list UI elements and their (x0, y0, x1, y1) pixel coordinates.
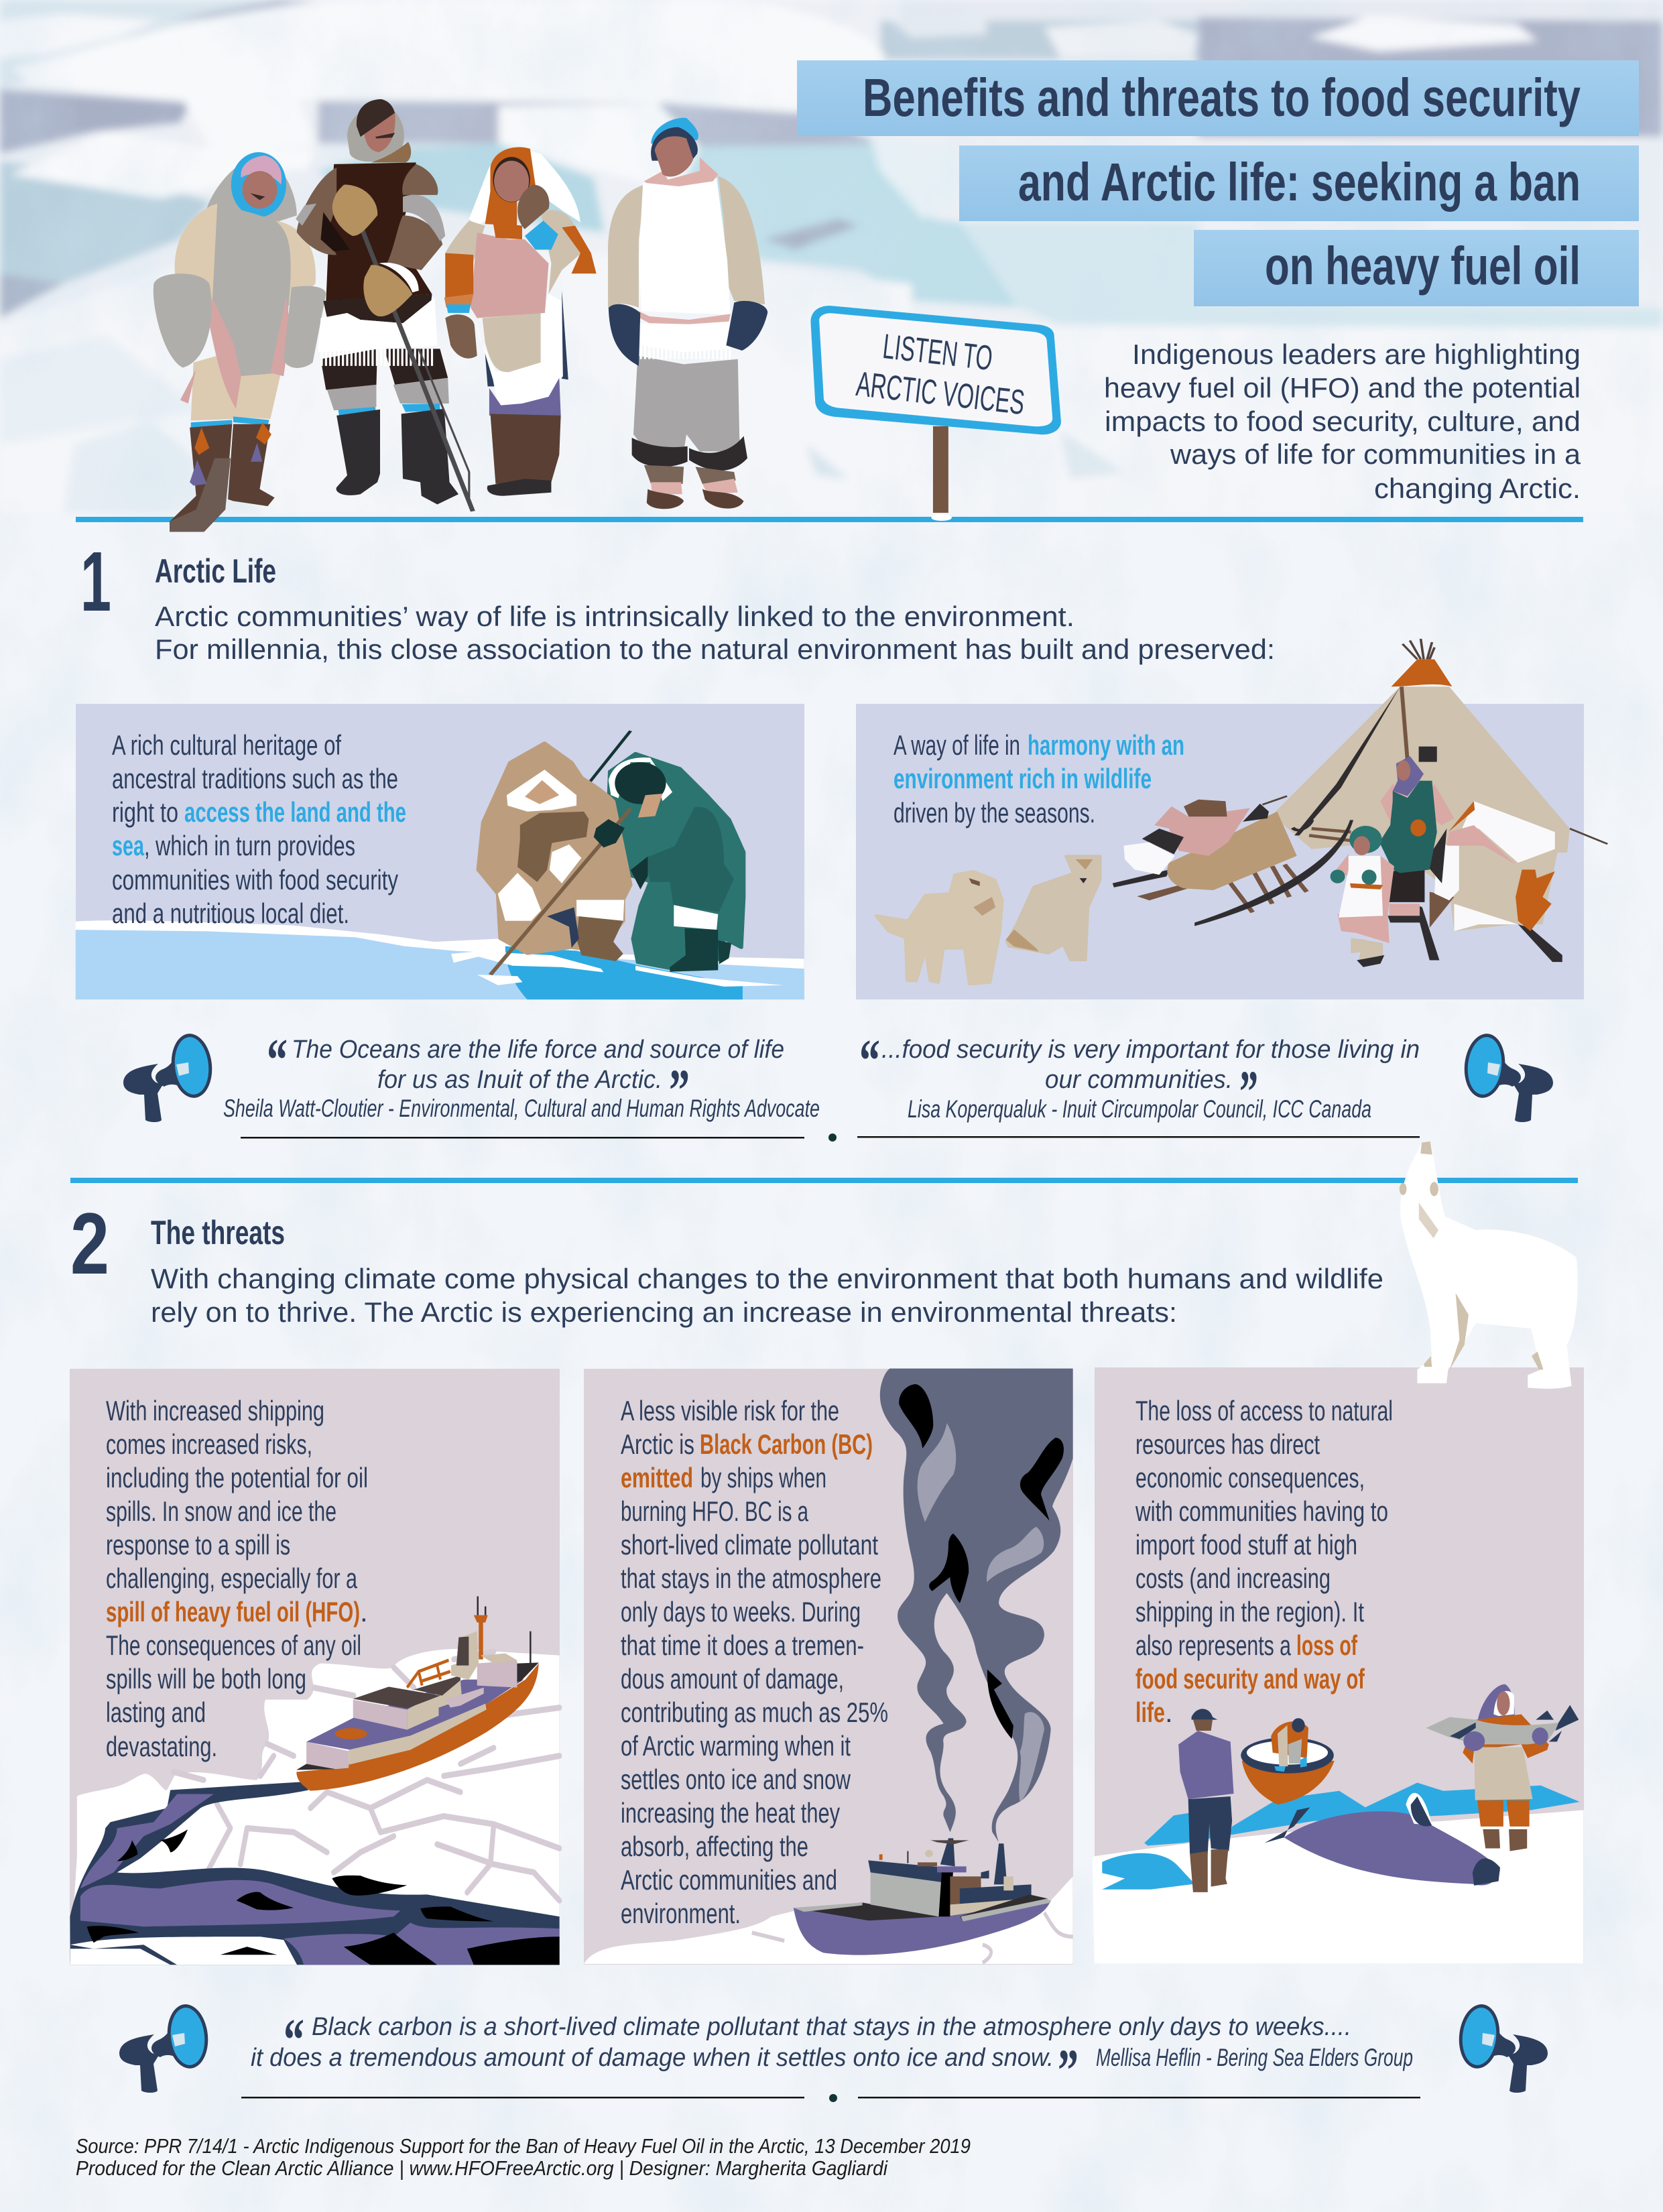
text: loss of access: also represents a (1135, 1630, 1291, 1661)
quote: Sheila Watt-Cloutier: ” (669, 1058, 690, 1124)
title (797, 60, 1639, 306)
text: black carbon: Black Carbon (BC) (700, 1428, 873, 1460)
text: oil spills: . (360, 1596, 368, 1627)
quote: Sheila Watt-Cloutier: “ (267, 1027, 288, 1093)
text: oil spills: comes increased risks, (106, 1428, 312, 1460)
divider line top (76, 517, 1583, 522)
text: cultural heritage (112, 729, 406, 929)
text: loss of access: The loss of access to natural (1135, 1395, 1393, 1426)
text: black carbon: absorb, affecting the (621, 1831, 808, 1862)
person: man in white parka (608, 118, 767, 509)
text: black carbon: that time it does a tremen- (621, 1630, 864, 1661)
quote: Mellisa Heflin: Mellisa Heflin - Bering Sea Elders Group (1096, 2044, 1413, 2071)
section 1 number: 1 (80, 534, 111, 629)
panel: oil spills (70, 1369, 560, 1965)
text: oil spills: With increased shipping (106, 1395, 324, 1426)
text: harmony with wildlife: driven by the seasons. (894, 797, 1095, 828)
quote: Lisa Koperqualuk (859, 1028, 1420, 1125)
text: black carbon: only days to weeks. During (621, 1596, 861, 1627)
icon: megaphone bottom left (119, 2002, 211, 2093)
icon: megaphone right (1461, 1032, 1553, 1122)
text: loss of access: loss of (1296, 1630, 1358, 1661)
quote: Sheila Watt-Cloutier: Sheila Watt-Cloutier - Environmental, Cultural and Human Rights Advocate (223, 1095, 820, 1122)
text: cultural heritage: A rich cultural heritage of (112, 729, 341, 761)
section 2 intro text: rely on to thrive. The Arctic is experiencing an increase in environmental threats: (151, 1296, 1177, 1328)
quote: Lisa Koperqualuk: “ (859, 1028, 880, 1094)
text: oil spills: spills will be both long (106, 1663, 306, 1695)
text: black carbon: that stays in the atmosphere (621, 1562, 881, 1594)
text: loss of access: costs (and increasing (1135, 1562, 1331, 1594)
text: black carbon: Arctic is (621, 1428, 694, 1460)
illustration: polar bear (1400, 1142, 1578, 1389)
divider line middle (70, 1178, 1578, 1183)
quote: Mellisa Heflin: it does a tremendous amount of damage when it settles onto ice and snow. (251, 2044, 1054, 2072)
text: oil spills (106, 1395, 368, 1762)
text: loss of access: economic consequences, (1135, 1462, 1365, 1493)
text: cultural heritage: , which in turn provides (144, 830, 355, 861)
intro text: Indigenous leaders are highlighting (1132, 339, 1581, 370)
text: black carbon: by ships when (700, 1462, 826, 1493)
footer: source and credits (76, 2134, 971, 2180)
text: cultural heritage: access the land and the (184, 796, 406, 828)
text: oil spills: challenging, especially for a (106, 1562, 357, 1594)
text: oil spills: including the potential for oil (106, 1462, 368, 1493)
intro text: changing Arctic. (1374, 473, 1581, 504)
text: cultural heritage: right to (112, 796, 178, 828)
panel: harmony with wildlife (856, 639, 1607, 999)
text: black carbon: A less visible risk for the (621, 1395, 839, 1426)
section 1 intro text: For millennia, this close association to the natural environment has built and preserved: (155, 633, 1275, 665)
quote: Mellisa Heflin: Black carbon is a short-lived climate pollutant that stays in the atmosphere only days to weeks.... (312, 2013, 1351, 2041)
text: black carbon (621, 1395, 888, 1929)
person: woman in grey parka (153, 152, 326, 532)
icon: megaphone bottom right (1456, 2002, 1548, 2093)
text: black carbon: settles onto ice and snow (621, 1764, 851, 1795)
quote: Mellisa Heflin (251, 2007, 1413, 2104)
text: oil spills: spill of heavy fuel oil (HFO) (106, 1596, 360, 1627)
panel: cultural heritage (76, 704, 804, 999)
text: loss of access: life (1135, 1697, 1165, 1728)
illustration: icebreaker and oil spill (70, 1596, 560, 1965)
text: loss of access: resources has direct (1135, 1428, 1320, 1460)
text: harmony with wildlife: environment rich in wildlife (894, 763, 1152, 794)
sign: listen to arctic voices: ARCTIC VOICES (854, 365, 1026, 422)
intro text: heavy fuel oil (HFO) and the potential (1104, 372, 1581, 404)
text: cultural heritage: and a nutritious local diet. (112, 898, 349, 929)
illustration: hunters and whale on ice (1093, 1684, 1584, 1963)
sign: listen to arctic voices (810, 306, 1061, 521)
quote: Lisa Koperqualuk: Lisa Koperqualuk - Inuit Circumpolar Council, ICC Canada (908, 1095, 1371, 1123)
section 1 intro text (155, 601, 1275, 665)
illustration: tent, sled, dogs and people (877, 639, 1607, 984)
illustration: hunters on the ice edge (76, 731, 804, 999)
footer: source and credits: Produced for the Clean Arctic Alliance | www.HFOFreeArctic.org | Designer: Margherita Gagliardi (76, 2156, 888, 2180)
illustration: ship with smoke plume (584, 1369, 1073, 1964)
text: black carbon: environment. (621, 1898, 741, 1929)
text: harmony with wildlife (894, 729, 1184, 828)
text: loss of access: shipping in the region). It (1135, 1596, 1364, 1627)
section 1 heading: Arctic Life (155, 552, 276, 590)
text: oil spills: spills. In snow and ice the (106, 1495, 336, 1527)
text: black carbon: contributing as much as 25% (621, 1697, 888, 1728)
illustration: four indigenous people (153, 99, 767, 532)
quote: Sheila Watt-Cloutier (223, 1027, 820, 1124)
quote: Sheila Watt-Cloutier: for us as Inuit of the Arctic. (377, 1066, 662, 1094)
text: black carbon: burning HFO. BC is a (621, 1495, 808, 1527)
icon: megaphone left (123, 1032, 215, 1122)
intro text (1104, 339, 1581, 504)
text: loss of access: with communities having to (1135, 1495, 1388, 1527)
text: black carbon: of Arctic warming when it (621, 1730, 851, 1762)
intro text: ways of life for communities in a (1170, 438, 1581, 470)
text: black carbon: emitted (621, 1462, 693, 1493)
quote: Mellisa Heflin: ” (1058, 2038, 1079, 2104)
text: black carbon: increasing the heat they (621, 1797, 840, 1829)
section 2 intro text: With changing climate come physical changes to the environment that both humans and wildlife (151, 1263, 1383, 1294)
text: cultural heritage: ancestral traditions such as the (112, 763, 398, 794)
panel: loss of access to resources (1093, 1367, 1584, 1963)
text: cultural heritage: sea (112, 830, 144, 861)
person: woman with orange scarf (444, 147, 597, 496)
text: loss of access: . (1165, 1697, 1173, 1728)
text: black carbon: Arctic communities and (621, 1864, 837, 1896)
text: harmony with wildlife: harmony with an (1028, 729, 1184, 761)
footer: source and credits: Source: PPR 7/14/1 - Arctic Indigenous Support for the Ban of Heavy Fuel Oil in the Arctic, 13 December 2019 (76, 2134, 971, 2158)
text: oil spills: response to a spill is (106, 1529, 290, 1560)
section 2 number: 2 (70, 1194, 109, 1292)
section 2 heading: The threats (151, 1214, 285, 1251)
text: harmony with wildlife: A way of life in (894, 729, 1020, 761)
text: oil spills: devastating. (106, 1731, 217, 1762)
quote: Lisa Koperqualuk: ” (1239, 1059, 1258, 1125)
section 2 intro text (151, 1263, 1383, 1328)
text: loss of access: food security and way of (1135, 1663, 1365, 1695)
text: oil spills: lasting and (106, 1697, 206, 1728)
text: oil spills: The consequences of any oil (106, 1630, 361, 1661)
person: man with staff (296, 99, 473, 511)
section 1 intro text: Arctic communities’ way of life is intrinsically linked to the environment. (155, 601, 1074, 632)
quote: Mellisa Heflin: “ (284, 2007, 304, 2073)
quote: Lisa Koperqualuk: ...food security is very important for those living in (881, 1036, 1420, 1064)
sign: listen to arctic voices: LISTEN TO (881, 327, 995, 378)
text: black carbon: short-lived climate pollutant (621, 1529, 878, 1560)
quote: Lisa Koperqualuk: our communities. (1045, 1066, 1233, 1094)
quote: Sheila Watt-Cloutier: The Oceans are the life force and source of life (292, 1036, 784, 1064)
text: cultural heritage: communities with food security (112, 864, 398, 896)
intro text: impacts to food security, culture, and (1105, 406, 1581, 437)
text: loss of access (1135, 1395, 1393, 1728)
panel: black carbon (584, 1369, 1073, 1965)
text: loss of access: import food stuff at high (1135, 1529, 1357, 1560)
text: black carbon: dous amount of damage, (621, 1663, 844, 1695)
